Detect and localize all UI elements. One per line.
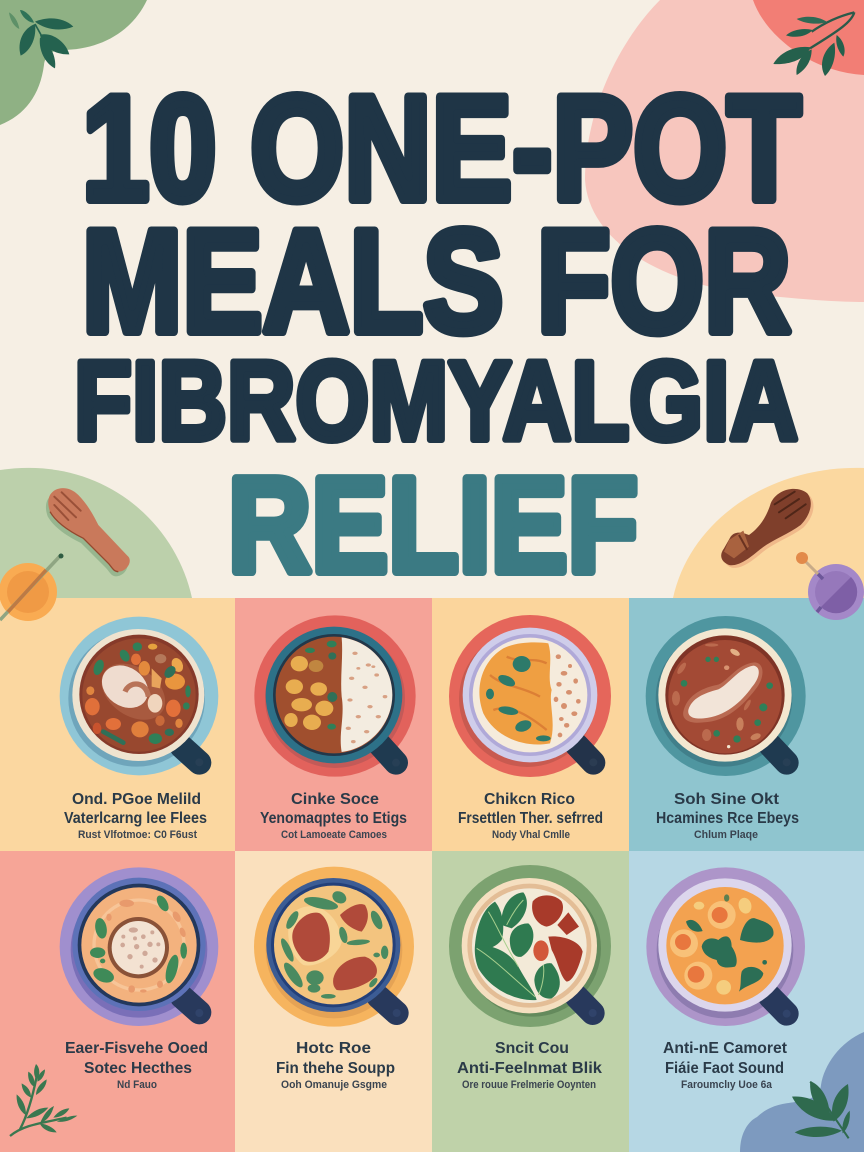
text: card 8 <box>663 1040 788 1091</box>
text: card 5: Nd Fauo <box>117 1079 157 1091</box>
meal card 5: creamy pot with center bowl <box>60 867 218 1026</box>
text: card 3 <box>458 791 603 841</box>
text: card 7: Anti-Feelnmat Blik <box>457 1060 602 1077</box>
text: card 6 <box>276 1040 395 1091</box>
meal card 7: greens and meat bowl <box>449 865 611 1027</box>
text: card 1: Rust Vlfotmoe: C0 F6ust <box>78 829 197 841</box>
icon: purple bowl accent <box>796 552 864 620</box>
blob: lower-left green <box>0 468 192 598</box>
text: card 2: Cot Lamoeate Camoes <box>281 829 387 841</box>
title <box>74 64 801 600</box>
text: card 7 <box>457 1040 602 1091</box>
text: card 8: Anti-nE Camoret <box>663 1040 788 1057</box>
text: card 4: Chlum Plaqe <box>694 829 758 841</box>
meal card 4: red stew with bread <box>646 616 806 776</box>
blob: top-left green <box>0 0 147 125</box>
text: card 2: Cinke Soce <box>291 791 379 808</box>
text: card 5: Sotec Hecthes <box>84 1060 192 1077</box>
blob: top-right coral <box>753 0 864 75</box>
meal card 6: meat and greens pot <box>254 867 414 1027</box>
text: card 7: Ore rouue Frelmerie Ooynten <box>462 1079 596 1091</box>
text: card 8: Fiáie Faot Sound <box>665 1060 784 1077</box>
text: card 8: Faroumclıy Uoe 6a <box>681 1079 773 1091</box>
blob: top-right pink <box>585 0 864 302</box>
icon: orange bowl accent <box>0 554 64 621</box>
text: card 2 <box>260 791 407 841</box>
icon: top-right leaves <box>773 12 854 76</box>
text: card 7: Sncit Cou <box>495 1040 569 1057</box>
blob: lower-right peach <box>673 468 864 598</box>
text: card 3: Frsettlen Ther. sefrred <box>458 810 603 827</box>
text: card 2: Yenomaqptes to Etigs <box>260 810 407 827</box>
text: card 1: Ond. PGoe Melild <box>72 791 201 808</box>
icon: bottom-left herb sprig <box>10 1064 77 1136</box>
text: card 5 <box>65 1040 208 1091</box>
icon: top-left leaves <box>9 10 73 68</box>
icon: bottom-right leaves <box>792 1081 850 1138</box>
text: card 1: Vaterlcarng lee Flees <box>64 810 207 827</box>
text: card 6: Fin thehe Soupp <box>276 1060 395 1077</box>
text: card 4: Soh Sine Okt <box>674 791 780 808</box>
panel: food grid backgrounds <box>0 598 864 1152</box>
blob: lower-right blue <box>740 1032 864 1152</box>
text: card 6: Hotc Roe <box>296 1040 371 1057</box>
title: RELIEF <box>228 450 638 600</box>
text: card 6: Ooh Omanuje Gsgme <box>281 1079 387 1091</box>
text: card 5: Eaer-Fisvehe Ooed <box>65 1040 208 1057</box>
text: card 3: Chikcn Rico <box>484 791 575 808</box>
icon: right wooden spoon <box>721 489 813 568</box>
text: card 1 <box>64 791 207 841</box>
meal card 3: chicken rice bowl <box>449 615 611 777</box>
meal card 8: orange soup with eggs <box>646 867 805 1026</box>
icon: left wooden spoon <box>46 488 130 576</box>
text: card 3: Nody Vhal Cmlle <box>492 829 570 841</box>
text: card 4: Hcamines Rce Ebeys <box>656 810 799 827</box>
meal card 1: stew bowl <box>60 617 218 775</box>
text: card 4 <box>656 791 799 841</box>
meal card 2: curry and rice pot <box>254 615 416 777</box>
